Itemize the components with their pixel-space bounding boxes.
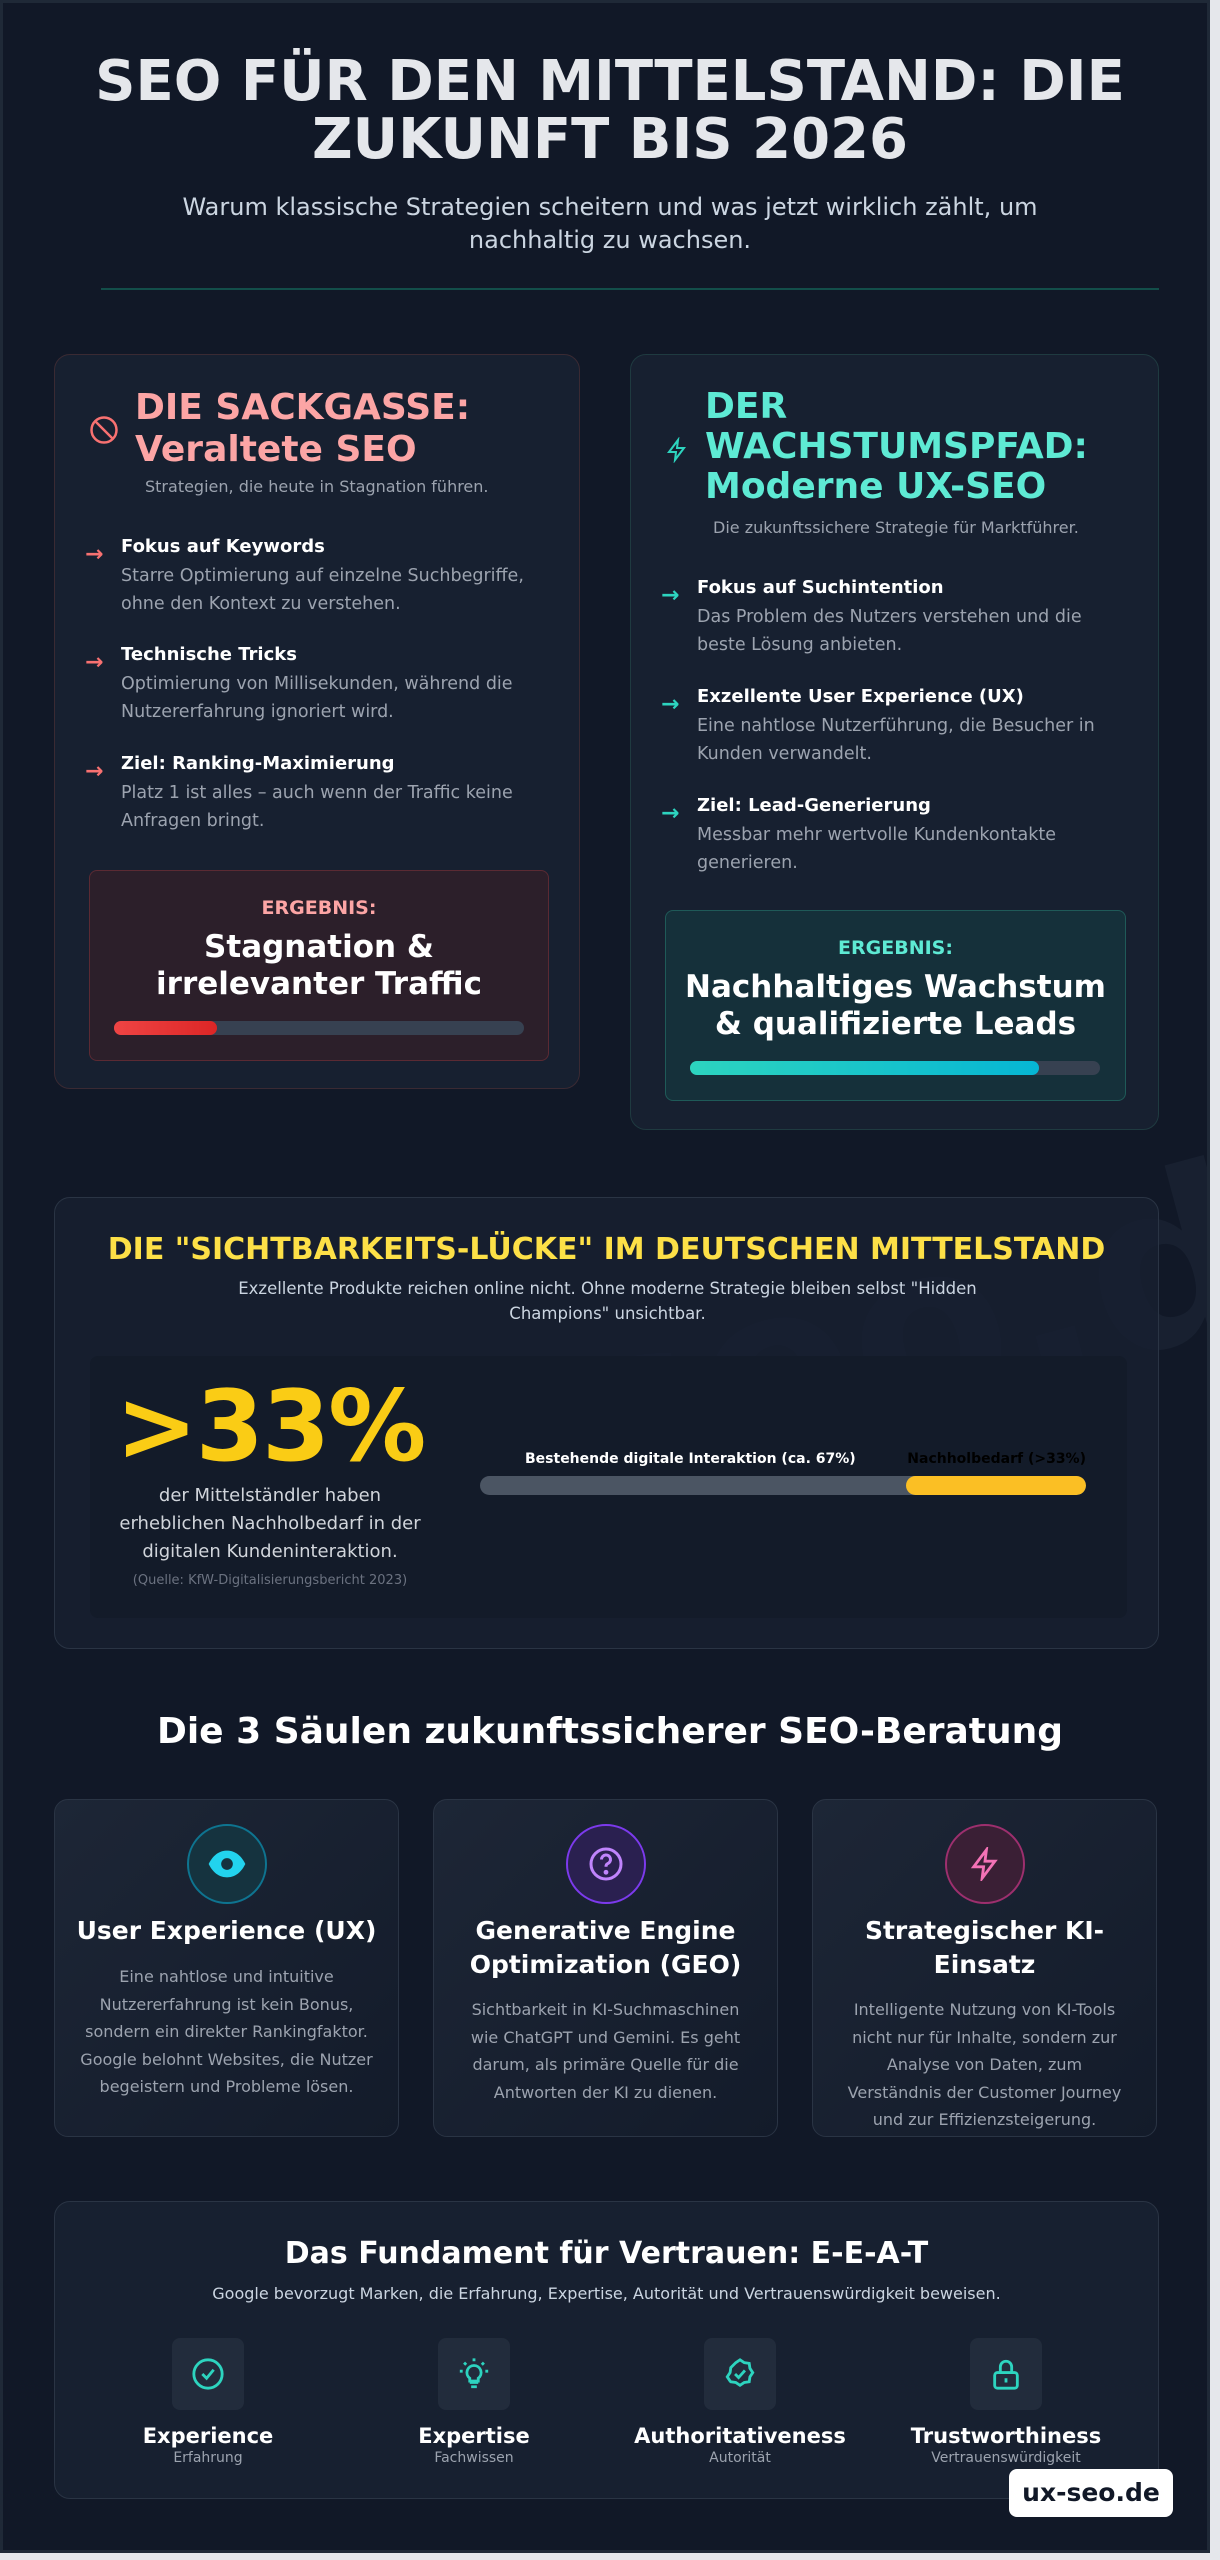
pillar: KI [812, 1799, 1157, 2137]
subtitle: Warum klassische Strategien scheitern und was jetzt wirklich zählt, um nachhaltig zu wachsen. [182, 193, 1038, 254]
eeat: experience: Erfahrung [173, 2450, 243, 2466]
result box: Stagnation & [204, 929, 434, 965]
eeat: authoritativeness: Autorität [709, 2450, 771, 2466]
icon: question [566, 1824, 646, 1904]
result box: ERGEBNIS: [838, 937, 953, 959]
eeat: trustworthiness [910, 2338, 1101, 2466]
item 3 [85, 753, 513, 831]
pillar: UX: User Experience (UX) [77, 1916, 376, 1945]
panel: veraltete SEO: Optimierung von Millisekunden, während die Nutzererfahrung ignoriert wird. [121, 674, 513, 722]
icon: bolt [667, 437, 686, 463]
heading: Moderne UX-SEO [705, 466, 1046, 507]
pillar: KI: Strategischer KI-Einsatz [865, 1916, 1104, 1979]
panel: veraltete SEO: Fokus auf Keywords [121, 536, 325, 557]
panel: veraltete SEO [54, 354, 580, 1089]
heading [135, 387, 470, 470]
panel: moderne UX-SEO: → [661, 692, 679, 717]
panel: moderne UX-SEO: Fokus auf Suchintention [697, 577, 944, 598]
panel: veraltete SEO: Starre Optimierung auf einzelne Suchbegriffe, ohne den Kontext zu verstehen. [121, 566, 524, 614]
subtitle: Google bevorzugt Marken, die Erfahrung, Expertise, Autorität und Vertrauenswürdigkeit beweisen. [212, 2284, 1001, 2303]
pillar: GEO [433, 1799, 778, 2137]
bar chart [480, 1451, 1086, 1495]
big stat: >33% [116, 1370, 424, 1484]
panel: moderne UX-SEO: Das Problem des Nutzers verstehen und die beste Lösung anbieten. [697, 607, 1082, 655]
result box [89, 870, 549, 1061]
eeat: expertise: Fachwissen [434, 2450, 514, 2466]
eeat: expertise [418, 2338, 530, 2466]
heading: Das Fundament für Vertrauen: E-E-A-T [285, 2236, 928, 2271]
heading [705, 386, 1088, 507]
heading: WACHSTUMSPFAD: [705, 426, 1088, 467]
title: SEO FÜR DEN MITTELSTAND: DIE [95, 49, 1125, 114]
item 2 [85, 644, 513, 722]
result box: ERGEBNIS: [262, 897, 376, 919]
panel: moderne UX-SEO: Eine nahtlose Nutzerführung, die Besucher in Kunden verwandelt. [697, 716, 1095, 764]
source: (Quelle: KfW-Digitalisierungsbericht 2023) [133, 1573, 407, 1588]
stat box [90, 1356, 1127, 1618]
item 1 [661, 577, 1082, 655]
panel: moderne UX-SEO: Exzellente User Experience (UX) [697, 686, 1024, 707]
eeat: trustworthiness: Trustworthiness [911, 2424, 1101, 2448]
pillar: UX [54, 1799, 399, 2137]
result box [665, 910, 1126, 1101]
result box: & qualifizierte Leads [715, 1006, 1076, 1042]
title: ZUKUNFT BIS 2026 [312, 107, 908, 172]
panel: moderne UX-SEO: Ziel: Lead-Generierung [697, 795, 931, 816]
panel: moderne UX-SEO [630, 354, 1159, 1130]
heading: DER [705, 386, 787, 427]
icon: bolt [945, 1824, 1025, 1904]
pillar: UX: Eine nahtlose und intuitive Nutzererfahrung ist kein Bonus, sondern ein direkter Rankingfaktor. Google belohnt Websites, die Nutzer begeistern und Probleme lösen. [80, 1967, 373, 2096]
item 2 [661, 686, 1095, 764]
pillar: GEO: Generative Engine Optimization (GEO) [470, 1916, 741, 1979]
subheading: Strategien, die heute in Stagnation führen. [145, 477, 488, 496]
panel: moderne UX-SEO: → [661, 801, 679, 826]
badge: ux-seo.de [1009, 2469, 1173, 2517]
panel: moderne UX-SEO: → [661, 583, 679, 608]
stat text: der Mittelständler haben erheblichen Nachholbedarf in der digitalen Kundeninteraktion. [119, 1485, 421, 1562]
panel: veraltete SEO: Technische Tricks [121, 644, 297, 665]
subtitle: Exzellente Produkte reichen online nicht. Ohne moderne Strategie bleiben selbst "Hidden Champions" unsichtbar. [238, 1279, 977, 1323]
panel: veraltete SEO: → [85, 759, 103, 784]
eeat: trustworthiness: Vertrauenswürdigkeit [931, 2450, 1081, 2466]
heading: DIE SACKGASSE: [135, 387, 470, 428]
panel: veraltete SEO: Platz 1 ist alles – auch wenn der Traffic keine Anfragen bringt. [121, 783, 513, 831]
panel: moderne UX-SEO: Messbar mehr wertvolle Kundenkontakte generieren. [697, 825, 1056, 873]
icon: eye [187, 1824, 267, 1904]
heading: 3 Säulen: Die 3 Säulen zukunftssicherer SEO-Beratung [157, 1711, 1063, 1752]
icon: forbidden [90, 416, 118, 444]
panel: veraltete SEO: → [85, 542, 103, 567]
pillar: KI: Intelligente Nutzung von KI-Tools nicht nur für Inhalte, sondern zur Analyse von Daten, zum Verständnis der Customer Journey und zur Effizienzsteigerung. [848, 2000, 1121, 2129]
panel: veraltete SEO: Ziel: Ranking-Maximierung [121, 753, 395, 774]
heading: Veraltete SEO [135, 429, 417, 470]
panel: Sichtbarkeits-Lücke [54, 1197, 1159, 1649]
badge: ux-seo.de: ux-seo.de [1022, 2478, 1160, 2507]
bar chart: Bestehende digitale Interaktion (ca. 67%) [525, 1451, 856, 1467]
eeat: authoritativeness: Authoritativeness [634, 2424, 846, 2448]
eeat: experience: Experience [143, 2424, 273, 2448]
subheading: Die zukunftssichere Strategie für Marktführer. [713, 518, 1079, 537]
heading: DIE "SICHTBARKEITS-LÜCKE" IM DEUTSCHEN MITTELSTAND [108, 1232, 1105, 1267]
eeat: experience [143, 2338, 273, 2466]
result box: Nachhaltiges Wachstum [685, 969, 1106, 1005]
pillar: GEO: Sichtbarkeit in KI-Suchmaschinen wie ChatGPT und Gemini. Es geht darum, als primäre Quelle für die Antworten der KI zu dienen. [471, 2000, 740, 2102]
item 1 [85, 536, 524, 614]
eeat: expertise: Expertise [418, 2424, 530, 2448]
item 3 [661, 795, 1056, 873]
result box: irrelevanter Traffic [156, 966, 482, 1002]
title [95, 48, 1125, 172]
panel: E-E-A-T [54, 2201, 1159, 2499]
panel: veraltete SEO: → [85, 650, 103, 675]
eeat: authoritativeness [634, 2338, 846, 2466]
bar chart: Nachholbedarf (>33%) [907, 1451, 1086, 1467]
